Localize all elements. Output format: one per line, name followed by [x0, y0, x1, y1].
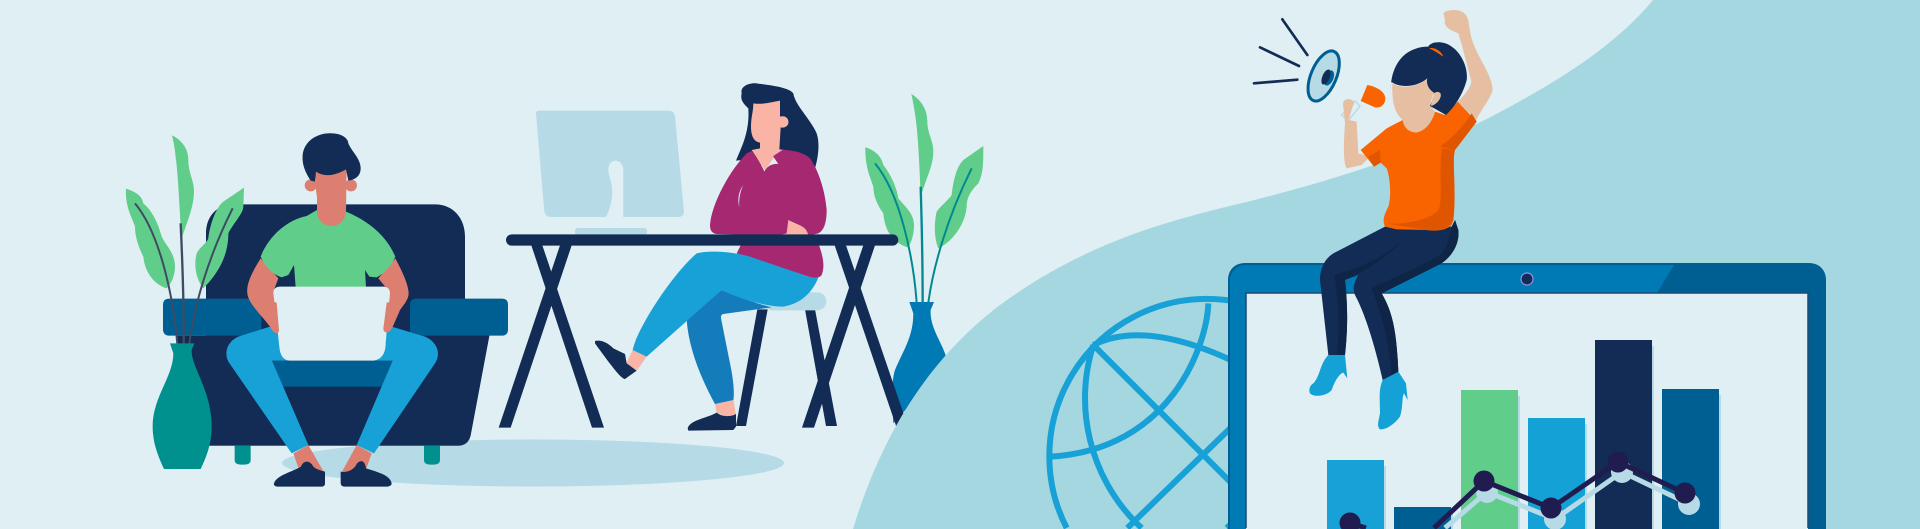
orange shirt	[1361, 102, 1477, 231]
hair	[1391, 42, 1467, 115]
laptop on lap	[273, 287, 390, 361]
woman cheering	[1309, 10, 1493, 429]
laptop	[1228, 263, 1826, 529]
legs	[1320, 220, 1459, 380]
line chart light	[1445, 461, 1700, 529]
man on armchair scene	[126, 133, 508, 487]
megaphone rays	[1254, 19, 1307, 83]
shoes	[1309, 355, 1347, 396]
megaphone body	[1342, 85, 1385, 121]
screen top edge	[1246, 293, 1808, 528]
face	[1392, 78, 1435, 132]
potted plant left	[126, 135, 244, 469]
desk scene	[499, 83, 983, 431]
desk	[499, 234, 908, 428]
woman with megaphone scene	[1254, 10, 1493, 429]
laptop frame	[1228, 263, 1826, 529]
monitor	[536, 111, 684, 235]
man	[226, 133, 438, 487]
megaphone bell	[1302, 47, 1346, 105]
line chart dark	[1340, 452, 1696, 529]
globe icon	[1049, 299, 1364, 528]
arms	[1343, 99, 1370, 168]
wave background shape	[853, 0, 1920, 529]
armchair	[163, 204, 508, 465]
webcam	[1521, 273, 1533, 285]
bar chart	[1327, 340, 1721, 529]
stool	[736, 292, 837, 426]
laptop screen	[1246, 293, 1808, 529]
potted plant right	[865, 94, 983, 423]
woman at desk	[595, 83, 827, 431]
floor shadow	[282, 440, 784, 486]
